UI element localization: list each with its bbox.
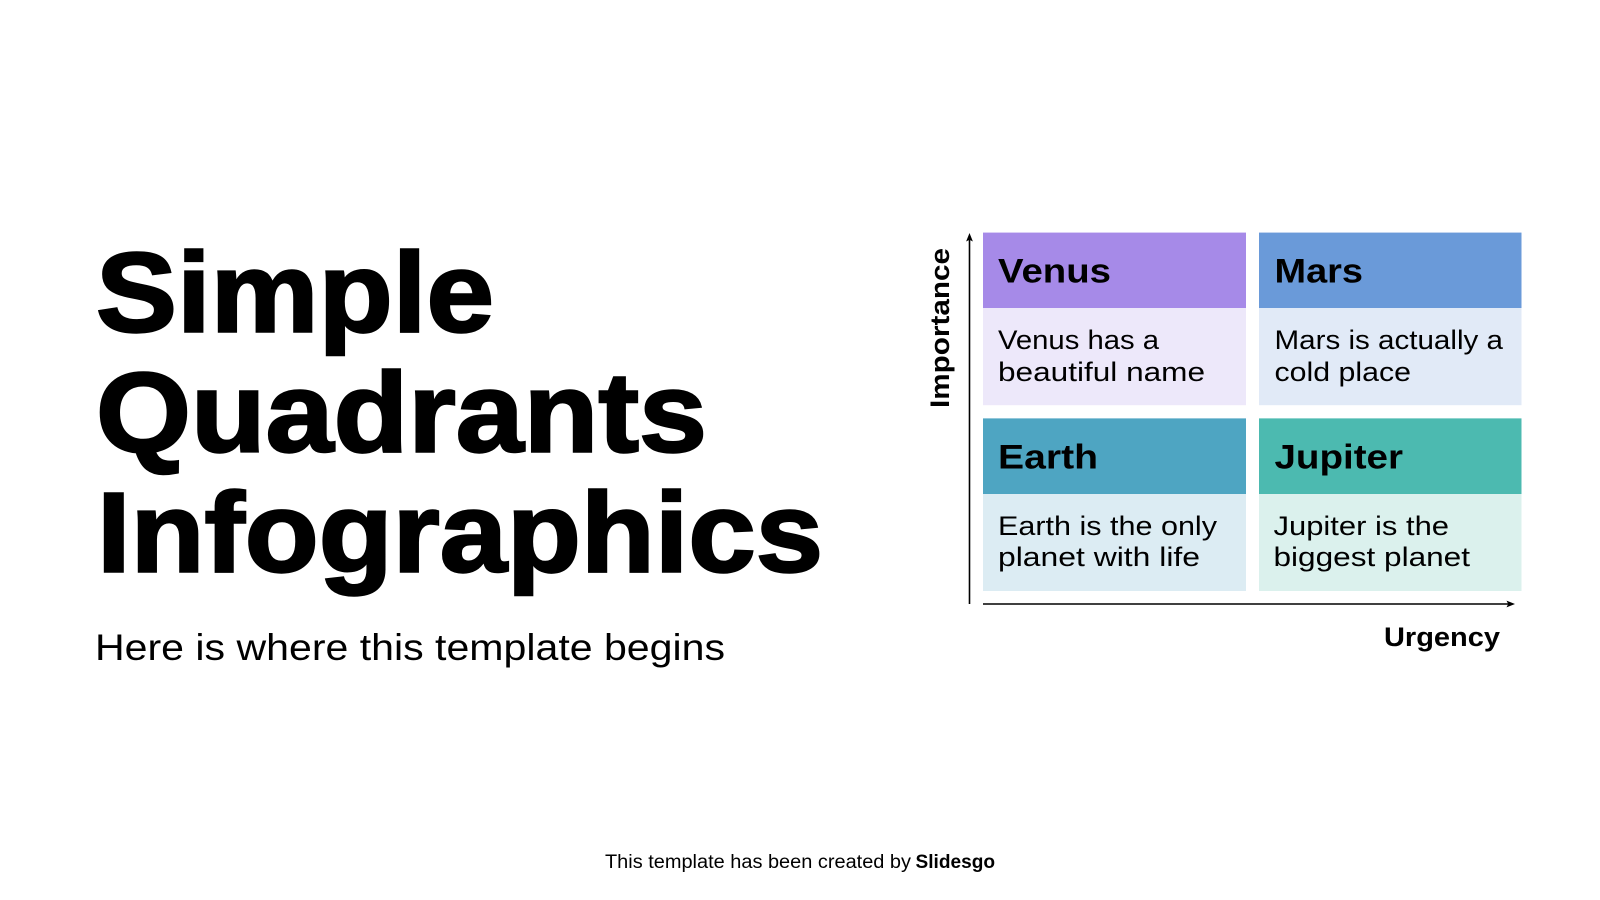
panel: Mars: Mars bbox=[1274, 253, 1363, 291]
panel: Venus: beautiful name bbox=[998, 357, 1205, 387]
subtitle: Here is where this template begins bbox=[95, 627, 725, 668]
axis label: importance: Importance bbox=[925, 248, 955, 408]
panel: Jupiter: Jupiter is the bbox=[1274, 511, 1449, 541]
panel: Mars: cold place bbox=[1274, 357, 1411, 387]
title: Infographics bbox=[97, 470, 823, 596]
panel: Mars bbox=[1259, 233, 1522, 405]
panel: Jupiter bbox=[1259, 418, 1522, 591]
title: Quadrants bbox=[96, 350, 707, 476]
panel: Jupiter: Jupiter bbox=[1274, 438, 1403, 476]
axis label: urgency: Urgency bbox=[1384, 622, 1500, 652]
panel: Earth: planet with life bbox=[998, 542, 1200, 572]
panel: Earth: Earth is the only bbox=[998, 511, 1218, 541]
footer credit: This template has been created by bbox=[605, 852, 912, 873]
arrow: importance axis bbox=[966, 233, 973, 604]
quadrant matrix bbox=[983, 233, 1522, 591]
panel: Earth bbox=[983, 418, 1246, 591]
footer credit: Slidesgo bbox=[916, 852, 995, 873]
panel: Jupiter: biggest planet bbox=[1274, 542, 1471, 572]
panel: Earth: Earth bbox=[998, 438, 1098, 476]
panel: Venus: Venus bbox=[998, 253, 1111, 291]
title bbox=[96, 230, 823, 596]
panel: Venus: Venus has a bbox=[998, 325, 1160, 355]
panel: Mars: Mars is actually a bbox=[1274, 325, 1504, 355]
title: Simple bbox=[96, 230, 494, 356]
panel: Venus bbox=[983, 233, 1246, 405]
arrow: urgency axis bbox=[983, 601, 1515, 607]
